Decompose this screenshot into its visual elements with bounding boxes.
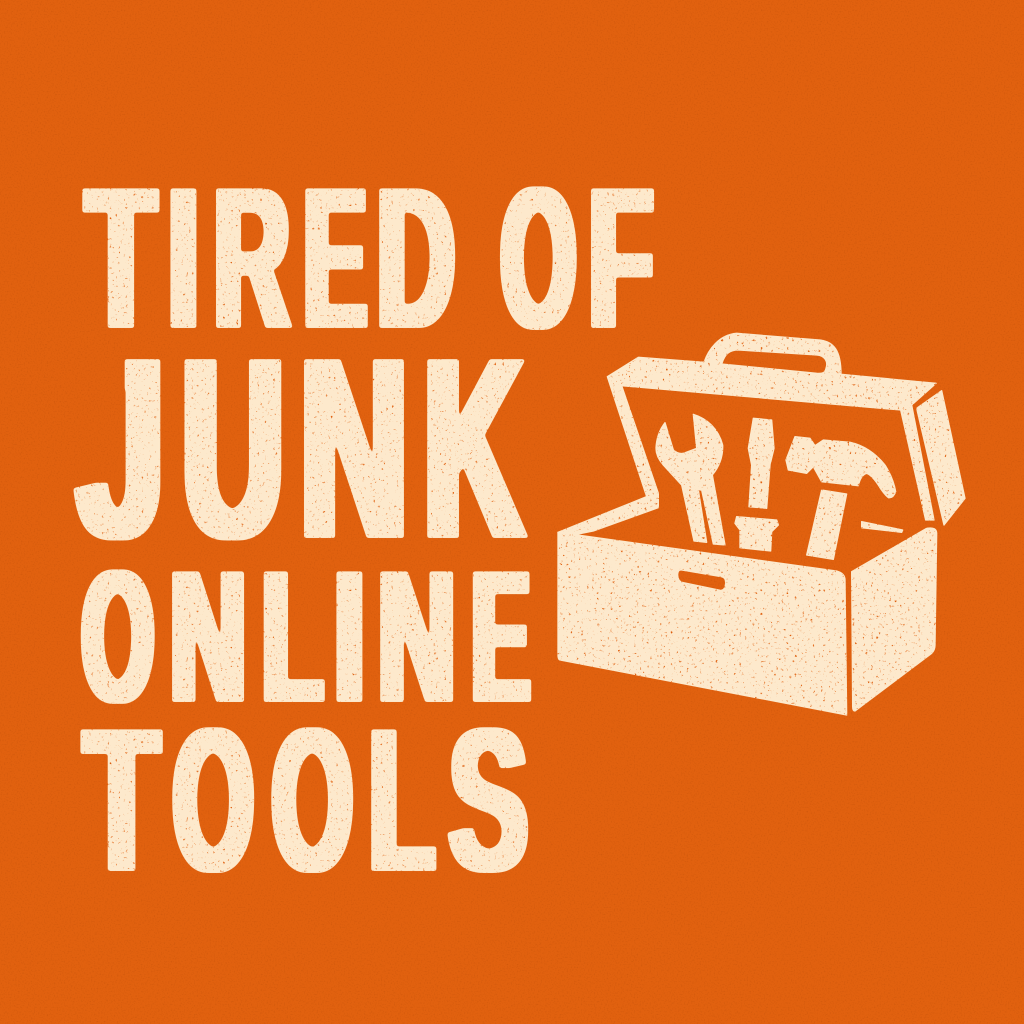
title line: TOOLS: O: [272, 687, 352, 914]
wrench: [656, 414, 725, 545]
hammer handle: [807, 490, 847, 559]
title line: TOOLS: S: [448, 687, 527, 914]
title line: ONLINE: I: [334, 532, 364, 741]
title line: TOOLS: L: [369, 687, 435, 914]
title line: ONLINE: [80, 532, 532, 741]
title line: TIRED OF: R: [214, 147, 290, 370]
title line: JUNK: U: [182, 305, 283, 592]
toolbox lid with handle: [558, 333, 936, 535]
title line: TOOLS: O: [173, 687, 253, 914]
title line: TIRED OF: O: [501, 147, 576, 370]
toolbox front with slot: [558, 532, 847, 715]
title line: JUNK: N: [300, 305, 408, 592]
title line: TIRED OF: T: [86, 147, 155, 370]
small nail sliver: [862, 522, 903, 532]
title line: ONLINE: L: [262, 532, 323, 741]
lid side panel: [917, 391, 965, 525]
title line: ONLINE: E: [472, 532, 530, 741]
icon: open toolbox: [558, 333, 965, 715]
title line: TOOLS: T: [84, 687, 159, 914]
screwdriver handle: [735, 517, 778, 551]
hammer head: [786, 437, 896, 498]
title: [74, 186, 654, 873]
title line: TIRED OF: D: [377, 147, 455, 370]
title line: TIRED OF: F: [589, 147, 653, 370]
toolbox side: [852, 528, 937, 711]
title line: JUNK: K: [424, 305, 523, 592]
title line: TIRED OF: I: [168, 147, 198, 370]
title line: ONLINE: N: [170, 532, 246, 741]
title line: ONLINE: O: [82, 532, 154, 741]
screwdriver blade: [748, 418, 774, 508]
title line: TOOLS: [80, 687, 528, 914]
title line: JUNK: J: [77, 305, 166, 592]
title line: TIRED OF: [82, 147, 654, 370]
title line: ONLINE: N: [378, 532, 455, 741]
title line: TIRED OF: E: [304, 147, 366, 370]
title line: JUNK: [74, 305, 528, 592]
